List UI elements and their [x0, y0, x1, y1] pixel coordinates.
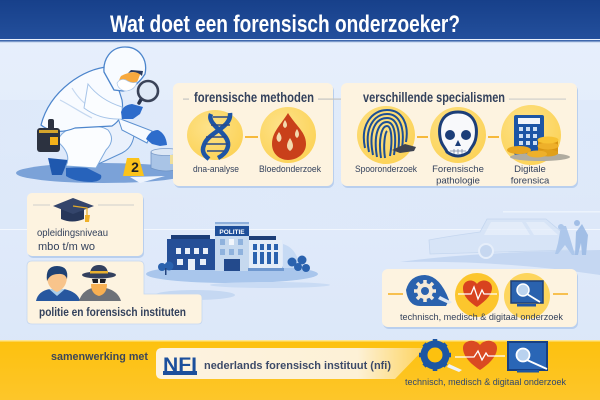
- illustration: faded police car and figures: [400, 211, 600, 275]
- icon: heart: [455, 341, 505, 370]
- text: technisch, medisch & digitaal onderzoek: [400, 312, 563, 323]
- nfi label: [156, 348, 425, 379]
- title: Wat doet een forensisch onderzoeker?: [110, 11, 460, 38]
- illustration: forensic investigator: [16, 47, 190, 183]
- icon: gear: [419, 339, 462, 372]
- icon: magnifying glass: [138, 81, 158, 103]
- connector: [245, 136, 258, 138]
- boots: [48, 158, 68, 175]
- icon: calculator and coins: [501, 105, 570, 165]
- connectors: [417, 136, 499, 138]
- torso: [41, 67, 123, 131]
- text: politie en forensisch instituten: [39, 307, 186, 319]
- label: Bloedonderzoek: Bloedonderzoek: [259, 164, 321, 175]
- panel: politie en forensisch instituten: [27, 261, 235, 324]
- title banner: [0, 0, 600, 42]
- back leg: [75, 118, 134, 166]
- icon: detective: [79, 265, 121, 301]
- face: [119, 72, 141, 89]
- icon: monitor: [508, 342, 547, 372]
- icon: skull: [430, 107, 486, 163]
- panel: technisch, medisch & digitaal onderzoek: [382, 269, 578, 329]
- icon: graduation cap: [53, 198, 94, 222]
- panel: opleidingsniveau: [27, 193, 144, 258]
- text: samenwerking met: samenwerking met: [51, 351, 148, 363]
- upper arm: [84, 84, 122, 119]
- icon: fingerprint: [357, 106, 416, 164]
- heading: forensische methoden: [194, 90, 314, 105]
- lower arm: [118, 118, 152, 143]
- icon: DNA: [187, 110, 243, 160]
- label: POLITIE: POLITIE: [219, 229, 245, 236]
- text: opleidingsniveau: opleidingsniveau: [37, 228, 108, 239]
- logo: NFI: NFI: [163, 355, 197, 376]
- text: mbo t/m wo: mbo t/m wo: [38, 241, 95, 253]
- panel: forensische methoden: [173, 83, 358, 188]
- illustration: police building: [146, 222, 330, 288]
- hood: [104, 47, 146, 91]
- text: nederlands forensisch instituut (nfi): [204, 360, 391, 372]
- icon: heart: [455, 273, 499, 317]
- icon: officer: [36, 266, 80, 301]
- text: technisch, medisch & digitaal onderzoek: [405, 377, 566, 388]
- footer band: [0, 339, 600, 400]
- tool belt: [37, 119, 60, 152]
- label: dna-analyse: dna-analyse: [193, 164, 239, 175]
- heading: verschillende specialismen: [363, 90, 505, 105]
- evidence marker 2: [123, 158, 144, 176]
- label: Forensische pathologie: pathologie: [436, 176, 480, 186]
- icon: gear: [406, 275, 452, 306]
- icon: blood drop: [260, 107, 316, 163]
- front leg: [58, 126, 112, 168]
- icon: monitor: [504, 273, 550, 319]
- evidence marker 2: 2: [131, 159, 139, 175]
- label: Spooronderzoek: Spooronderzoek: [355, 164, 417, 175]
- panel: verschillende specialismen: [341, 83, 578, 188]
- label: Digitale forensica: Digitale: [514, 164, 546, 175]
- evidence container: [151, 148, 181, 171]
- label: Digitale forensica: forensica: [511, 176, 550, 186]
- gloves: [121, 104, 143, 119]
- label: Forensische pathologie: Forensische: [432, 164, 484, 175]
